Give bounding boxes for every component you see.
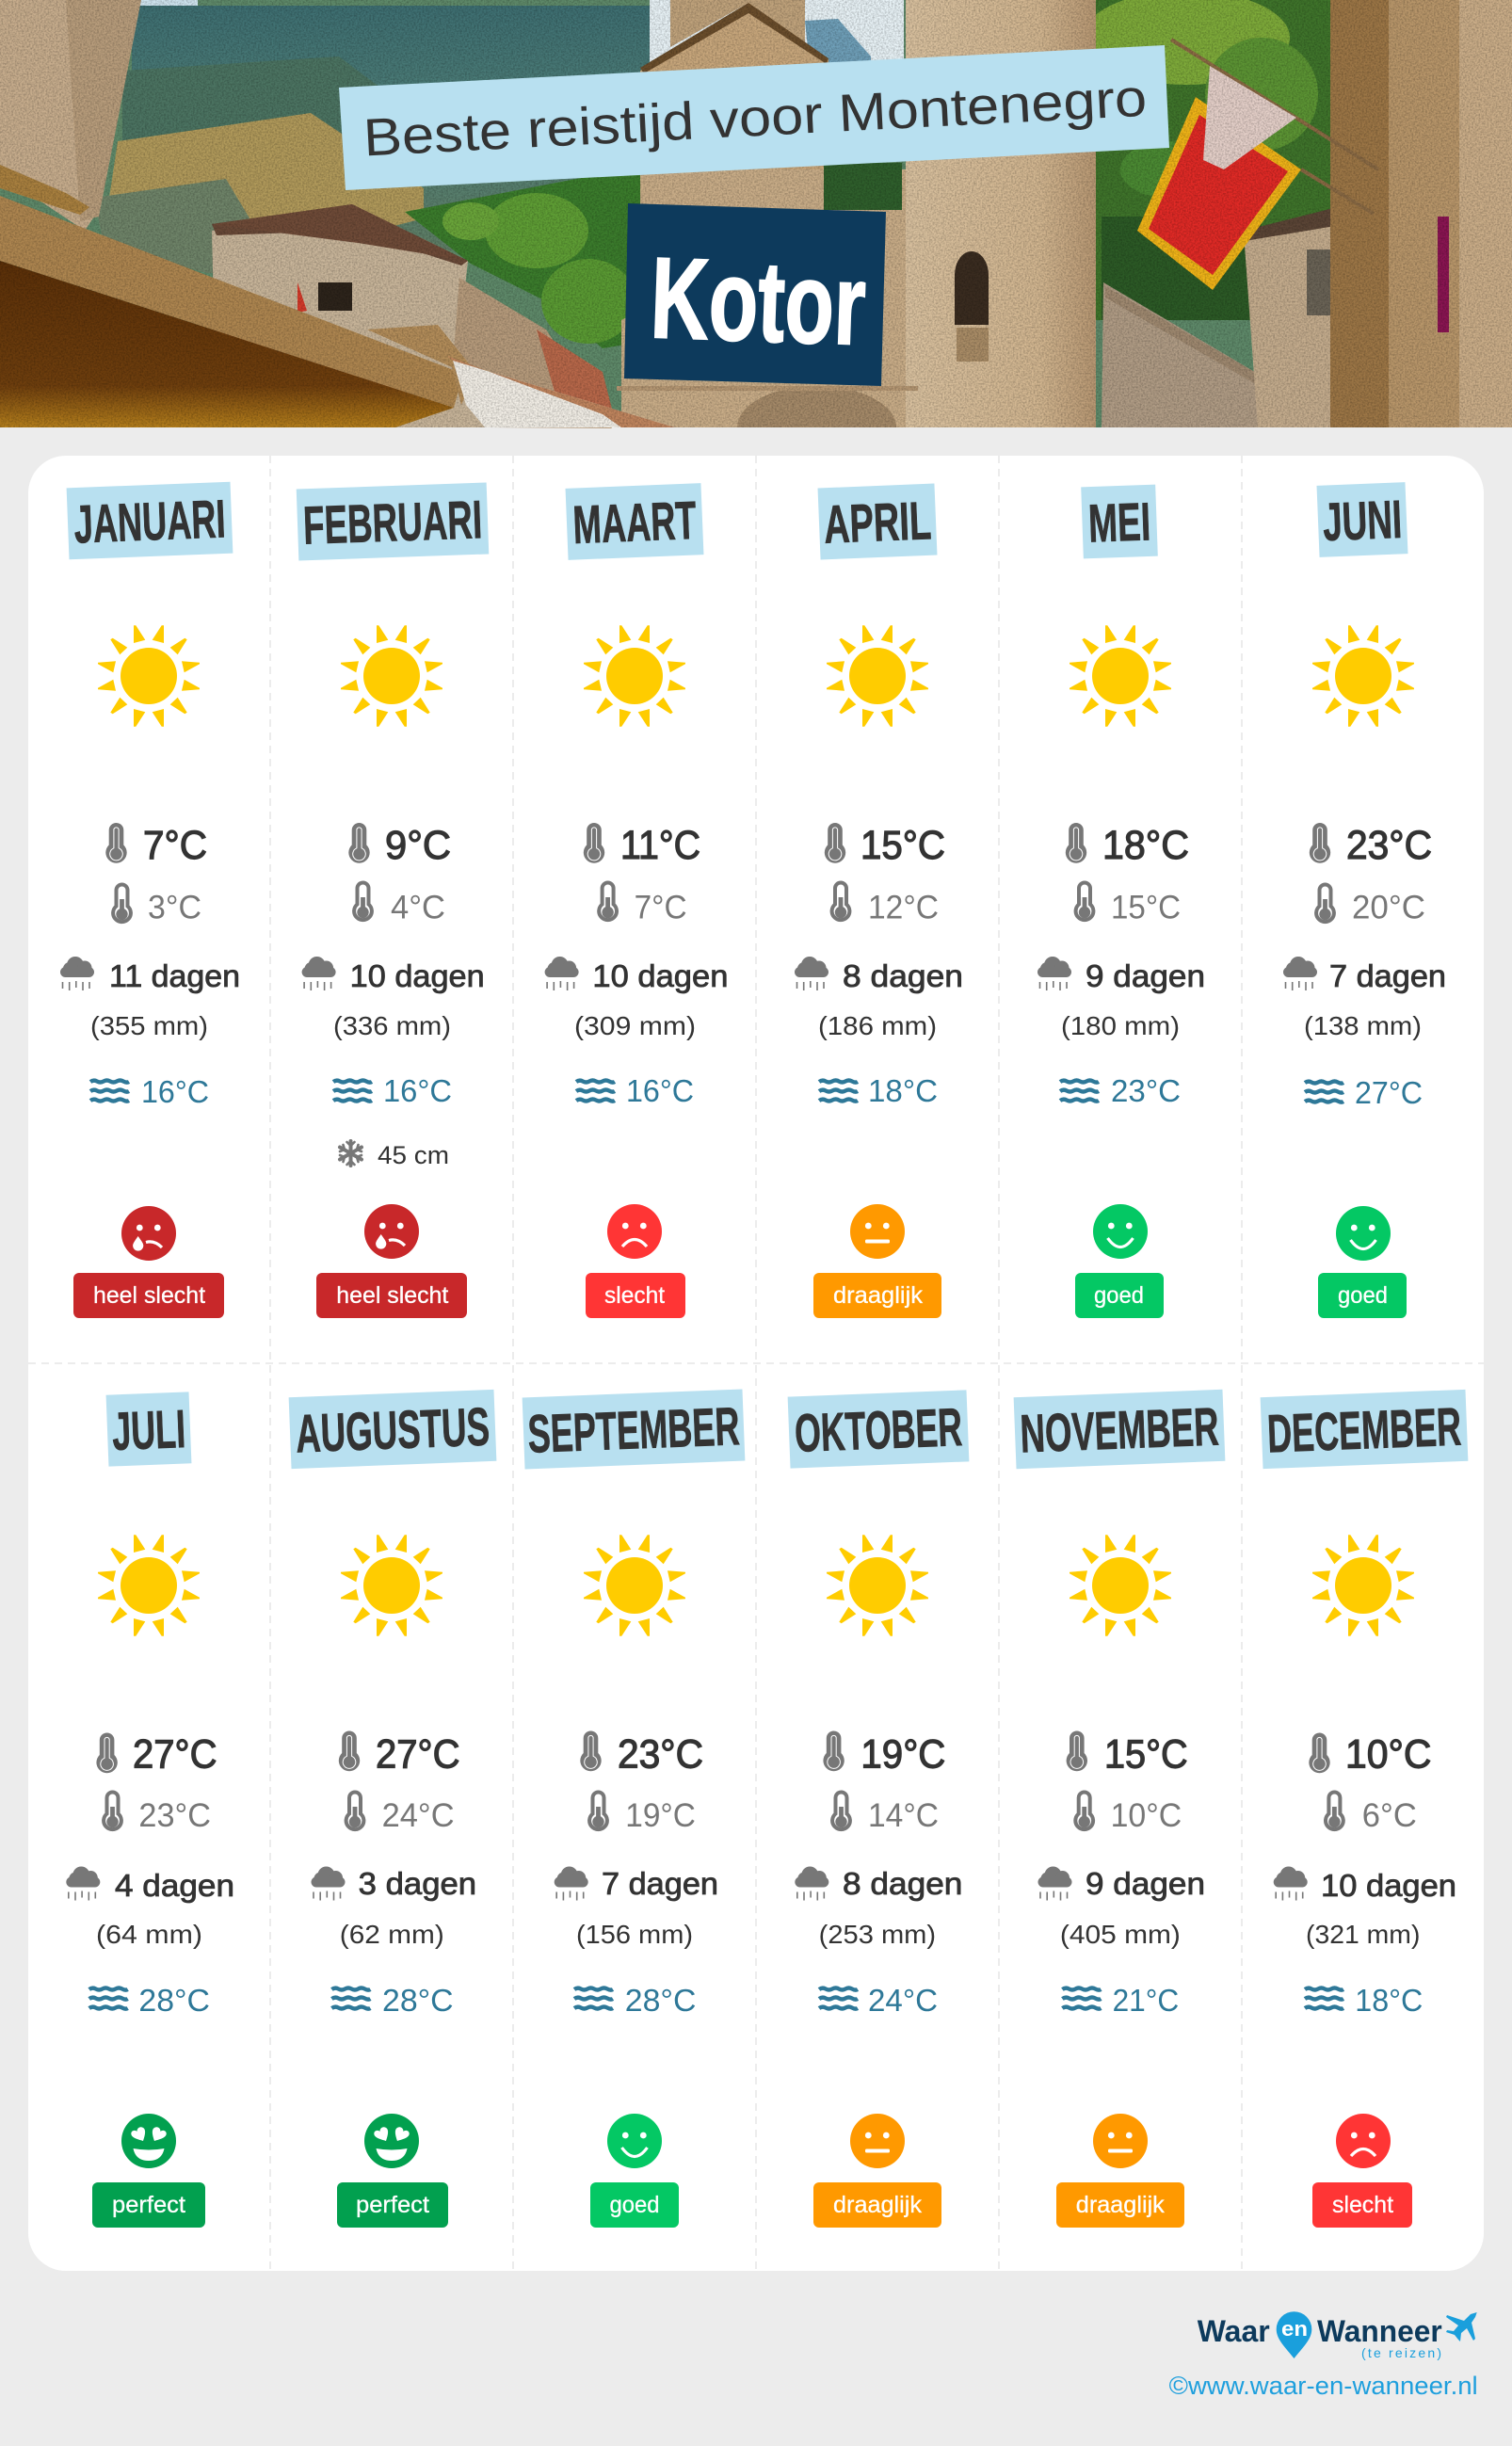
maximum temperature: 15°C — [1104, 1732, 1188, 1778]
rating badge: draaglijk — [833, 2192, 922, 2218]
month heading: juli: JULI — [111, 1399, 186, 1462]
rain days: 9 dagen — [1086, 958, 1205, 993]
panel: oktober — [788, 1390, 969, 2228]
title banner: Beste reistijd voor Montenegro — [362, 68, 1149, 167]
rainfall: (62 mm) — [340, 1920, 444, 1949]
city name box: Kotor — [624, 203, 886, 386]
rating face — [364, 2114, 419, 2168]
month heading: november: NOVEMBER — [1019, 1396, 1220, 1465]
month heading: oktober: OKTOBER — [794, 1397, 963, 1464]
rating badge — [586, 1273, 685, 1318]
rain days: 7 dagen — [602, 1866, 718, 1901]
snow depth — [340, 1141, 449, 1169]
rating badge: goed — [610, 2192, 659, 2218]
rating badge: perfect — [356, 2192, 429, 2218]
panel: mei — [1037, 485, 1205, 1318]
month heading: juli — [106, 1392, 191, 1467]
hero photo: Kotor street scene — [0, 0, 1512, 428]
city name box: Kotor: Kotor — [649, 233, 868, 369]
icon: sun — [98, 625, 200, 727]
sea temperature: 24°C — [868, 1983, 938, 2018]
sea temperature: 28°C — [625, 1983, 696, 2018]
month heading: oktober — [788, 1390, 969, 1469]
panel: januari — [60, 482, 240, 1318]
logo: Waar en Wanneer: (te reizen) — [1361, 2345, 1441, 2360]
rainfall: (321 mm) — [1306, 1920, 1420, 1949]
sea temperature: 21°C — [1113, 1983, 1179, 2018]
rainfall: (156 mm) — [576, 1920, 693, 1949]
sea temperature: 16°C — [383, 1073, 452, 1108]
rainfall: (253 mm) — [819, 1920, 936, 1949]
icon: sun — [1312, 625, 1414, 727]
month heading: augustus — [289, 1390, 496, 1469]
maximum temperature — [105, 823, 207, 868]
maximum temperature — [1066, 823, 1189, 868]
panel: april — [795, 484, 963, 1318]
rating badge: draaglijk — [1076, 2192, 1165, 2218]
minimum temperature — [354, 883, 445, 926]
panel: november — [1014, 1390, 1225, 2228]
maximum temperature: 23°C — [1346, 823, 1432, 868]
panel: juli — [66, 1392, 234, 2228]
month heading: april: APRIL — [823, 491, 932, 555]
rainfall: (355 mm) — [90, 1011, 208, 1040]
rainfall: (138 mm) — [1304, 1011, 1422, 1040]
minimum temperature: 14°C — [868, 1797, 939, 1834]
sea temperature: 16°C — [141, 1074, 209, 1109]
sea temperature: 18°C — [1355, 1983, 1423, 2018]
sea temperature — [1060, 1073, 1181, 1108]
rating face — [121, 1206, 176, 1261]
maximum temperature: 27°C — [376, 1732, 459, 1778]
maximum temperature — [823, 1731, 945, 1778]
maximum temperature — [580, 1731, 703, 1778]
maximum temperature — [584, 823, 700, 868]
panel: augustus — [289, 1390, 496, 2228]
minimum temperature — [832, 883, 939, 926]
rainfall: (186 mm) — [818, 1011, 937, 1040]
icon: sun — [1070, 1535, 1171, 1636]
month heading: februari: FEBRUARI — [302, 490, 483, 556]
rain days: 9 dagen — [1086, 1866, 1205, 1901]
rating badge — [1075, 1273, 1164, 1318]
rain days: 10 dagen — [592, 958, 728, 993]
minimum temperature: 20°C — [1352, 889, 1425, 926]
sea temperature — [1062, 1983, 1179, 2018]
month heading: september — [523, 1390, 745, 1469]
minimum temperature — [1326, 1793, 1417, 1834]
icon: sun — [827, 625, 928, 727]
rating badge — [1056, 2182, 1184, 2228]
sea temperature: 27°C — [1355, 1075, 1423, 1110]
rating badge — [1312, 2182, 1412, 2228]
maximum temperature: 15°C — [861, 823, 945, 868]
rain days — [555, 1866, 718, 1901]
rain days: 3 dagen — [359, 1866, 476, 1901]
rating badge — [813, 1273, 941, 1318]
month heading: mei — [1081, 485, 1158, 558]
rating badge — [337, 2182, 448, 2228]
maximum temperature — [825, 823, 945, 868]
minimum temperature — [589, 1793, 696, 1834]
rating badge — [813, 2182, 941, 2228]
rating badge: heel slecht — [93, 1282, 205, 1309]
month heading: maart: MAART — [571, 491, 698, 555]
rating badge: goed — [1338, 1282, 1388, 1309]
month heading: november — [1014, 1390, 1225, 1469]
rain days — [1037, 1866, 1205, 1901]
maximum temperature — [96, 1732, 217, 1778]
rating badge — [1318, 1273, 1407, 1318]
icon: sun — [584, 625, 685, 727]
month heading: mei: MEI — [1087, 491, 1151, 555]
minimum temperature: 12°C — [868, 889, 939, 926]
maximum temperature: 27°C — [133, 1732, 217, 1778]
minimum temperature: 7°C — [635, 889, 687, 926]
maximum temperature — [1310, 823, 1432, 868]
sea temperature: 18°C — [868, 1073, 938, 1108]
month heading: juni: JUNI — [1322, 490, 1403, 553]
rating face — [1093, 2114, 1148, 2168]
icon: sun — [341, 625, 442, 727]
maximum temperature: 7°C — [143, 823, 207, 868]
rainfall: (336 mm) — [333, 1011, 451, 1040]
icon: airplane — [1446, 2312, 1477, 2341]
icon: map pin — [1277, 2311, 1311, 2358]
maximum temperature: 10°C — [1345, 1732, 1431, 1778]
maximum temperature — [348, 823, 451, 868]
month heading: april — [818, 484, 937, 559]
rain days: 8 dagen — [843, 958, 963, 993]
maximum temperature: 9°C — [385, 823, 451, 868]
website credit: ©www.waar-en-wanneer.nl — [1169, 2372, 1478, 2400]
minimum temperature: 19°C — [625, 1797, 696, 1834]
month heading: augustus: AUGUSTUS — [295, 1397, 491, 1464]
rating face — [121, 2114, 176, 2168]
maximum temperature: 19°C — [861, 1732, 945, 1778]
minimum temperature — [104, 1793, 211, 1834]
sea temperature — [90, 1074, 209, 1109]
rainfall: (64 mm) — [96, 1920, 202, 1949]
minimum temperature: 4°C — [391, 889, 445, 926]
minimum temperature: 15°C — [1111, 889, 1181, 926]
month heading: september: SEPTEMBER — [526, 1396, 741, 1465]
panel: september — [523, 1390, 745, 2228]
icon: sun — [98, 1535, 200, 1636]
icon: sun — [1312, 1535, 1414, 1636]
minimum temperature — [346, 1793, 455, 1834]
panel: december — [1261, 1390, 1468, 2228]
month heading: januari — [67, 482, 233, 559]
maximum temperature — [1067, 1731, 1188, 1778]
minimum temperature: 6°C — [1362, 1797, 1417, 1834]
rain days — [311, 1866, 476, 1901]
panel: maart — [545, 483, 728, 1318]
logo: Waar en Wanneer — [1198, 2311, 1477, 2360]
rating badge — [590, 2182, 679, 2228]
rating badge: goed — [1094, 1282, 1144, 1309]
rating badge — [73, 1273, 224, 1318]
maximum temperature: 18°C — [1102, 823, 1189, 868]
sea temperature — [574, 1983, 696, 2018]
rain days — [795, 1866, 962, 1901]
icon: sun — [1070, 625, 1171, 727]
rating badge: slecht — [1332, 2192, 1393, 2218]
rainfall: (309 mm) — [574, 1011, 696, 1040]
rating badge: heel slecht — [336, 1282, 448, 1309]
panel: juni — [1283, 482, 1446, 1318]
rating face — [607, 1204, 662, 1259]
sea temperature: 28°C — [382, 1983, 454, 2018]
minimum temperature: 24°C — [382, 1797, 455, 1834]
sea temperature — [333, 1073, 452, 1108]
rainfall: (180 mm) — [1061, 1011, 1180, 1040]
sea temperature: 16°C — [626, 1073, 694, 1108]
title banner — [339, 45, 1169, 190]
rating badge: perfect — [112, 2192, 185, 2218]
snow depth: 45 cm — [378, 1141, 449, 1169]
sea temperature — [1305, 1075, 1423, 1110]
rain days — [302, 957, 485, 993]
rain days: 11 dagen — [109, 958, 240, 993]
minimum temperature — [113, 885, 201, 926]
month heading: juni — [1317, 482, 1407, 557]
panel: februari — [297, 482, 489, 1318]
minimum temperature — [832, 1793, 939, 1834]
rain days: 7 dagen — [1329, 958, 1446, 993]
rain days: 4 dagen — [115, 1868, 234, 1903]
panel: monthly climate card — [28, 456, 1484, 2271]
rating badge: draaglijk — [833, 1282, 924, 1309]
rating face — [850, 1204, 905, 1259]
icon: map pin: en — [1281, 2317, 1308, 2341]
sea temperature: 28°C — [138, 1983, 210, 2018]
rain days: 8 dagen — [843, 1866, 962, 1901]
rainfall: (405 mm) — [1060, 1920, 1181, 1949]
rain days — [1283, 957, 1446, 993]
rain days — [1037, 957, 1205, 993]
minimum temperature: 23°C — [138, 1797, 211, 1834]
sea temperature — [819, 1983, 938, 2018]
sea temperature: 23°C — [1111, 1073, 1181, 1108]
month heading: februari — [297, 482, 489, 561]
rating badge: slecht — [604, 1282, 665, 1309]
icon: sun — [827, 1535, 928, 1636]
logo: Waar en Wanneer: Waar — [1198, 2314, 1270, 2348]
rating face — [850, 2114, 905, 2168]
rain days: 10 dagen — [350, 958, 485, 993]
minimum temperature — [599, 883, 687, 926]
icon: sun — [584, 1535, 685, 1636]
minimum temperature: 3°C — [148, 889, 201, 926]
rain days — [66, 1866, 234, 1903]
sea temperature — [331, 1983, 454, 2018]
logo: Waar en Wanneer: Wanneer — [1317, 2314, 1442, 2348]
maximum temperature: 23°C — [618, 1732, 703, 1778]
rating badge — [316, 1273, 467, 1318]
rating badge — [92, 2182, 205, 2228]
sea temperature — [1305, 1983, 1423, 2018]
rating face — [1336, 2114, 1391, 2168]
maximum temperature — [1309, 1732, 1431, 1778]
maximum temperature: 11°C — [620, 823, 700, 868]
rating face — [1336, 1206, 1391, 1261]
month heading: maart — [566, 483, 703, 560]
month heading: januari: JANUARI — [72, 489, 227, 555]
minimum temperature: 10°C — [1111, 1797, 1182, 1834]
rating face — [364, 1204, 419, 1259]
rating face — [1093, 1204, 1148, 1259]
minimum temperature — [1075, 1793, 1182, 1834]
rain days — [60, 957, 240, 993]
icon: sun — [341, 1535, 442, 1636]
sea temperature — [819, 1073, 938, 1108]
sea temperature — [576, 1073, 694, 1108]
rating face — [607, 2114, 662, 2168]
rain days — [795, 957, 963, 993]
minimum temperature — [1316, 885, 1425, 926]
maximum temperature — [339, 1731, 459, 1778]
sea temperature — [89, 1983, 210, 2018]
rain days — [1274, 1866, 1456, 1903]
rain days: 10 dagen — [1321, 1868, 1456, 1903]
rain days — [545, 957, 728, 993]
minimum temperature — [1076, 883, 1181, 926]
